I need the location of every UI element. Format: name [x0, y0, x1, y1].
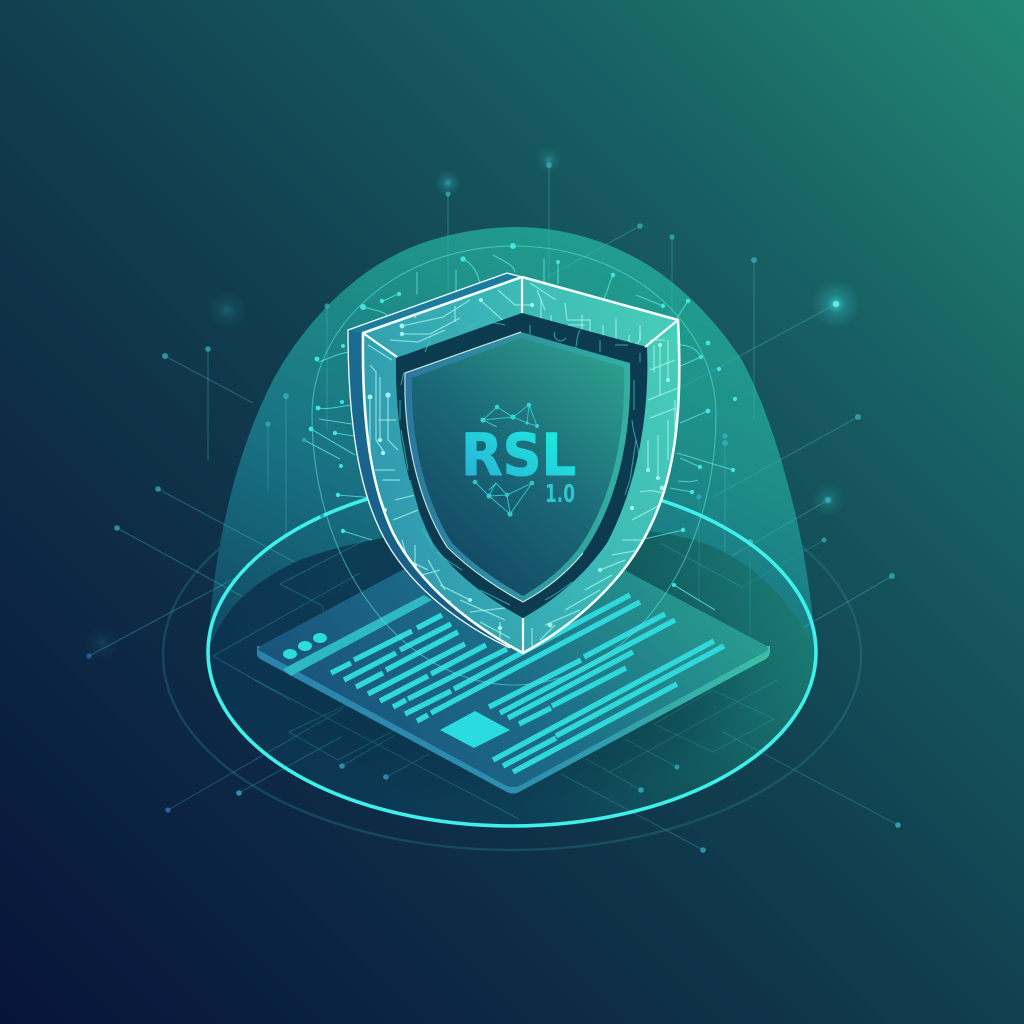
dark band circuit traces — [400, 322, 640, 605]
floor circuit lines — [168, 497, 898, 850]
shield — [348, 273, 679, 653]
shield inner rim — [405, 332, 630, 602]
RSL logotype: RSL — [461, 421, 576, 489]
shield white outlines — [348, 273, 679, 653]
shield bevel — [363, 277, 679, 653]
document image block — [440, 711, 510, 748]
bevel circuit traces — [368, 283, 678, 650]
document shadow — [245, 555, 755, 805]
document panel — [257, 513, 770, 794]
document header dots — [283, 633, 327, 659]
document text lines — [331, 595, 724, 772]
document sheet — [257, 513, 770, 794]
background network lines — [89, 165, 892, 656]
protective dome — [208, 227, 816, 690]
document header bar — [283, 595, 432, 676]
thin orbit around shield — [312, 246, 716, 685]
background network nodes — [86, 162, 895, 659]
bright floor ring edge — [208, 478, 816, 826]
shield inner face — [412, 338, 624, 596]
halo nodes — [302, 243, 737, 587]
version number: 1.0 — [545, 479, 575, 508]
inner rim highlights — [405, 332, 583, 602]
floor circuit nodes — [165, 539, 901, 853]
halo circuits around shield — [304, 255, 733, 610]
floor disc — [208, 525, 816, 826]
logo network top — [480, 403, 539, 428]
logo network bottom — [473, 480, 534, 517]
outer floor ring — [163, 460, 861, 850]
background glows — [84, 147, 860, 661]
shield side wall — [348, 273, 523, 653]
shield dark inner band — [396, 313, 647, 618]
